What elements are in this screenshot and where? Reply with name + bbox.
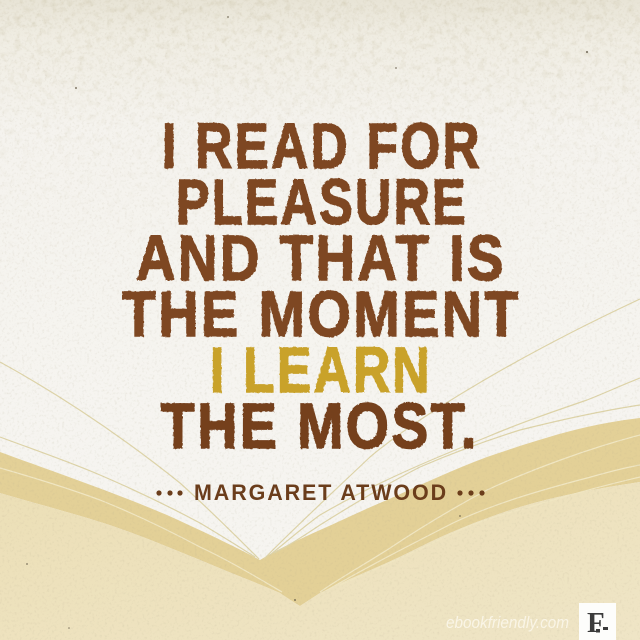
line: PLEASURE: PLEASURE xyxy=(176,166,468,238)
author name: MARGARET ATWOOD xyxy=(194,480,448,505)
right dots xyxy=(457,490,485,496)
attribution xyxy=(156,480,485,505)
logo badge: F xyxy=(587,607,605,639)
line: AND THAT IS: AND THAT IS xyxy=(136,222,506,294)
book page edges band xyxy=(0,418,640,606)
line: I READ FOR: I READ FOR xyxy=(162,110,482,182)
paper background xyxy=(0,0,640,120)
logo badge xyxy=(579,603,616,640)
line: THE MOST.: THE MOST. xyxy=(161,390,479,462)
right page lines xyxy=(264,299,640,559)
left dots xyxy=(156,490,183,496)
website credit: ebookfriendly.com xyxy=(446,614,569,632)
lower book page xyxy=(0,482,640,640)
line: I LEARN (highlight): I LEARN xyxy=(210,334,432,406)
left page lines xyxy=(0,362,259,559)
quote text xyxy=(122,110,521,462)
band crease lines xyxy=(0,435,640,593)
open book illustration xyxy=(0,299,640,640)
line: THE MOMENT: THE MOMENT xyxy=(122,278,521,350)
